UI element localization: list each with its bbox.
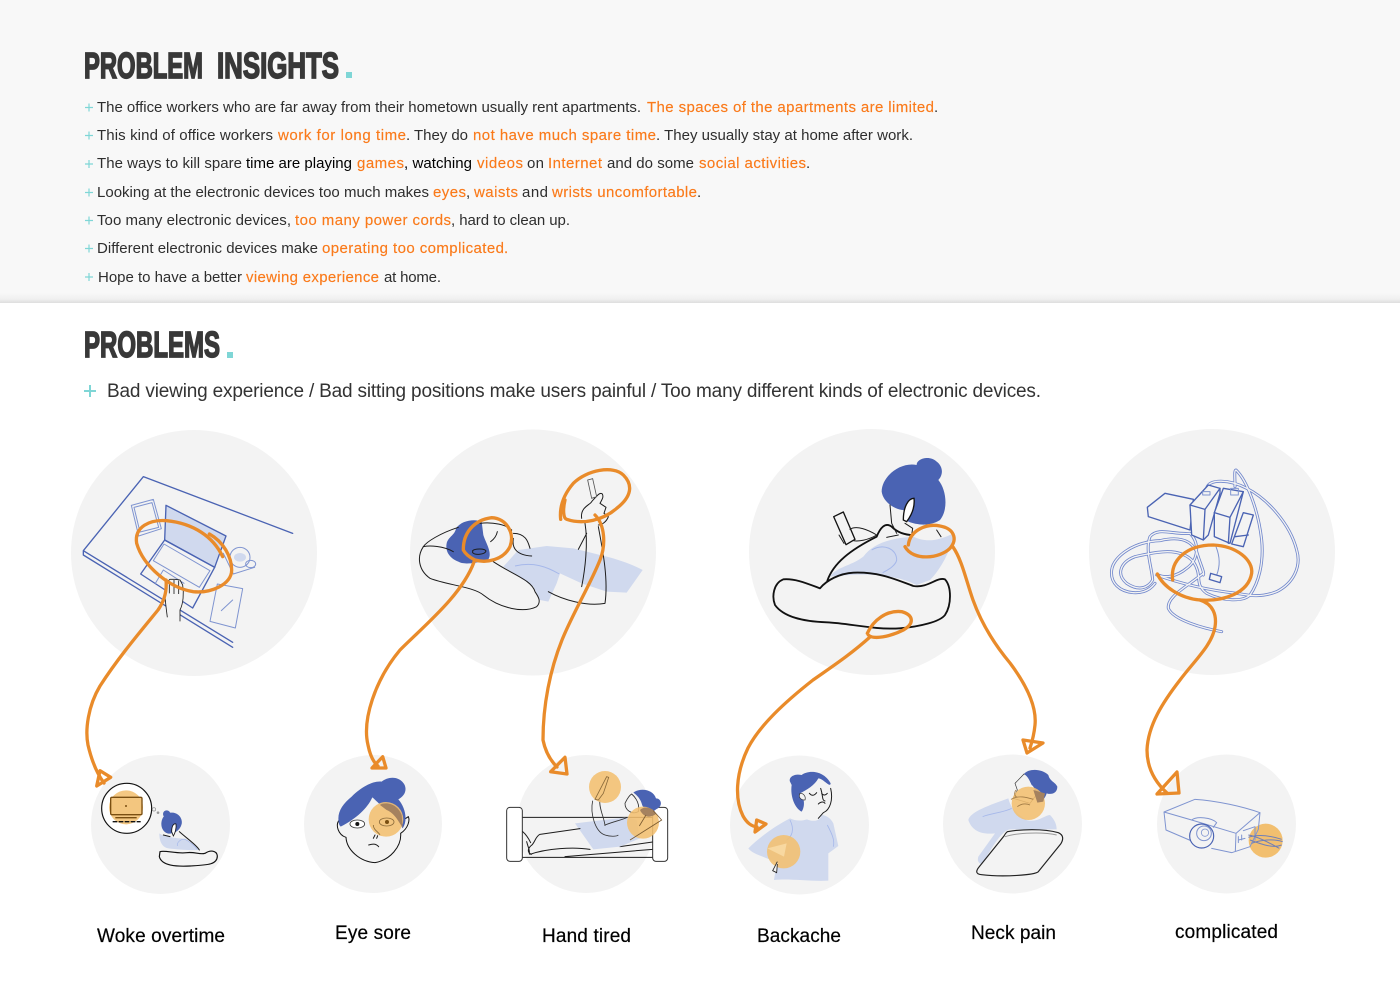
insight list: , watching xyxy=(404,155,472,172)
illustration: reclining on cushion with phone xyxy=(749,429,995,675)
label: neck pain: Neck pain xyxy=(971,923,1056,944)
insight list: social activities xyxy=(699,155,806,172)
insight list: operating too complicated xyxy=(322,240,504,257)
callout: backache xyxy=(730,756,869,894)
label: backache: Backache xyxy=(757,926,841,947)
insight list: videos xyxy=(477,155,523,172)
label: hand tired: Hand tired xyxy=(542,926,631,947)
insight list: and do some xyxy=(607,155,694,172)
arrow: complicated xyxy=(1147,600,1215,794)
callout: hand tired xyxy=(507,755,668,893)
arrow: neck pain xyxy=(953,547,1043,753)
insight list: Too many electronic devices, xyxy=(97,212,291,229)
insight list: too many power cords xyxy=(295,212,451,229)
insight list: Internet xyxy=(548,155,603,172)
insight list: wrists uncomfortable xyxy=(551,184,697,201)
heading: problem insights: PROBLEM xyxy=(84,45,203,86)
insight list: The office workers who are far away from their hometown usually rent apartments. xyxy=(97,99,641,116)
arrow: backache xyxy=(738,637,870,832)
insight list: not have much spare time xyxy=(473,127,656,144)
insight list xyxy=(85,99,938,286)
insight list: waists xyxy=(473,184,518,201)
insight list: , hard to clean up. xyxy=(451,212,570,229)
insight list: The ways to kill spare xyxy=(97,155,242,172)
insight list: . xyxy=(934,99,938,116)
insight list: and xyxy=(522,184,548,201)
insight list: This kind of office workers xyxy=(97,127,273,144)
heading: problems: PROBLEMS xyxy=(84,324,220,365)
insight list: Hope to have a better xyxy=(98,269,242,286)
insight list: games xyxy=(357,155,404,172)
insight list: at home. xyxy=(384,269,441,286)
insight list: . xyxy=(504,240,508,257)
illustration: lying on bed with phone xyxy=(410,430,656,676)
insight list: , xyxy=(466,184,470,201)
arrow: woke overtime xyxy=(87,580,166,786)
arrow: hand tired xyxy=(543,515,604,774)
callout: neck pain xyxy=(943,754,1082,894)
insight list: work for long time xyxy=(277,127,406,144)
callout: eye sore xyxy=(304,755,442,893)
label: complicated: complicated xyxy=(1175,922,1278,943)
panel: problem insights xyxy=(0,0,1400,303)
insight list: time are playing xyxy=(246,155,352,172)
heading: problem insights: INSIGHTS xyxy=(217,45,339,86)
insight list: Different electronic devices make xyxy=(97,240,318,257)
callout: woke overtime xyxy=(91,755,230,894)
insight list: on xyxy=(527,155,544,172)
heading: problem insights xyxy=(84,45,352,86)
illustration: tangled power cords and devices xyxy=(1089,429,1335,675)
insight list: . They do xyxy=(406,127,468,144)
insight list: Looking at the electronic devices too much makes xyxy=(97,184,429,201)
illustration: laptop on desk xyxy=(71,430,317,676)
problems summary: Bad viewing experience / Bad sitting positions make users painful / Too many different kinds of electronic devices. xyxy=(107,381,1041,402)
arrow: eye sore xyxy=(367,562,474,768)
insight list: . xyxy=(806,155,810,172)
insight list: . They usually stay at home after work. xyxy=(656,127,913,144)
callout: complicated xyxy=(1157,754,1296,894)
insight list: . xyxy=(697,184,701,201)
label: eye sore: Eye sore xyxy=(335,923,411,944)
insight list: The spaces of the apartments are limited xyxy=(647,99,934,116)
label: woke overtime: Woke overtime xyxy=(97,926,225,947)
insight list: eyes xyxy=(433,184,466,201)
insight list: viewing experience xyxy=(246,269,379,286)
